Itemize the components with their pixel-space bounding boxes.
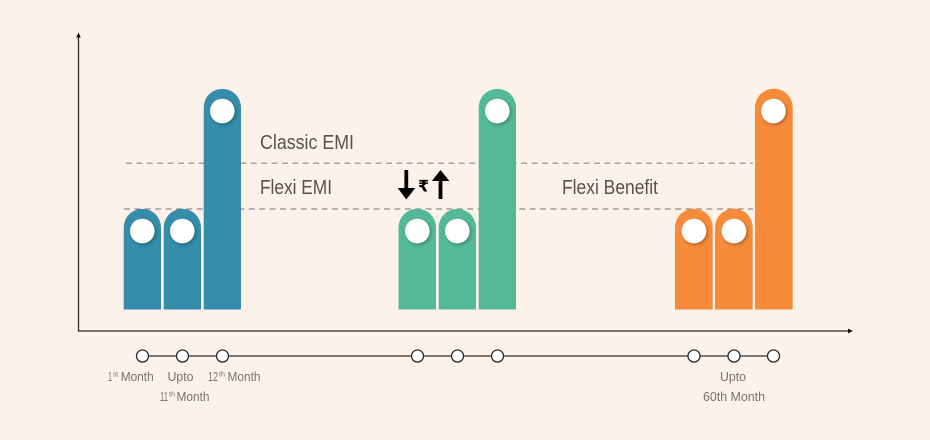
label: Classic EMI: Classic EMI — [260, 132, 354, 154]
label: Flexi Benefit: Flexi Benefit — [562, 177, 658, 199]
label: Upto (11th): Upto — [168, 369, 194, 384]
label: 11th Month: 11 — [160, 389, 168, 404]
bar group: orange — [675, 89, 793, 310]
icon: rupee sign: ₹ — [418, 176, 429, 196]
label: 12th Month: th — [219, 372, 225, 378]
label: 1st Month: st — [113, 372, 118, 378]
label: 60th Month: 60th Month — [703, 389, 765, 404]
label: 12th Month — [208, 369, 260, 384]
label: 1st Month: Month — [121, 369, 154, 384]
label: 12th Month: 12 — [208, 369, 218, 384]
bar group: blue — [124, 89, 241, 310]
dashed line: classic EMI level — [126, 162, 753, 164]
label: 11th Month: Month — [176, 389, 210, 404]
label: Flexi EMI: Flexi EMI — [260, 177, 332, 199]
timeline — [136, 350, 780, 362]
label: 1st Month: 1 — [108, 369, 112, 384]
dashed line: flexi EMI level — [124, 208, 753, 210]
icon: up arrow — [432, 170, 449, 199]
label: Upto (60th): Upto — [720, 369, 746, 384]
icon: down arrow — [398, 170, 415, 200]
bar group: green — [398, 89, 516, 309]
chart axes — [76, 32, 853, 333]
label: 11th Month — [160, 389, 210, 404]
label: 1st Month — [108, 369, 154, 384]
label: 11th Month: th — [169, 392, 175, 398]
label: 12th Month: Month — [228, 369, 260, 384]
